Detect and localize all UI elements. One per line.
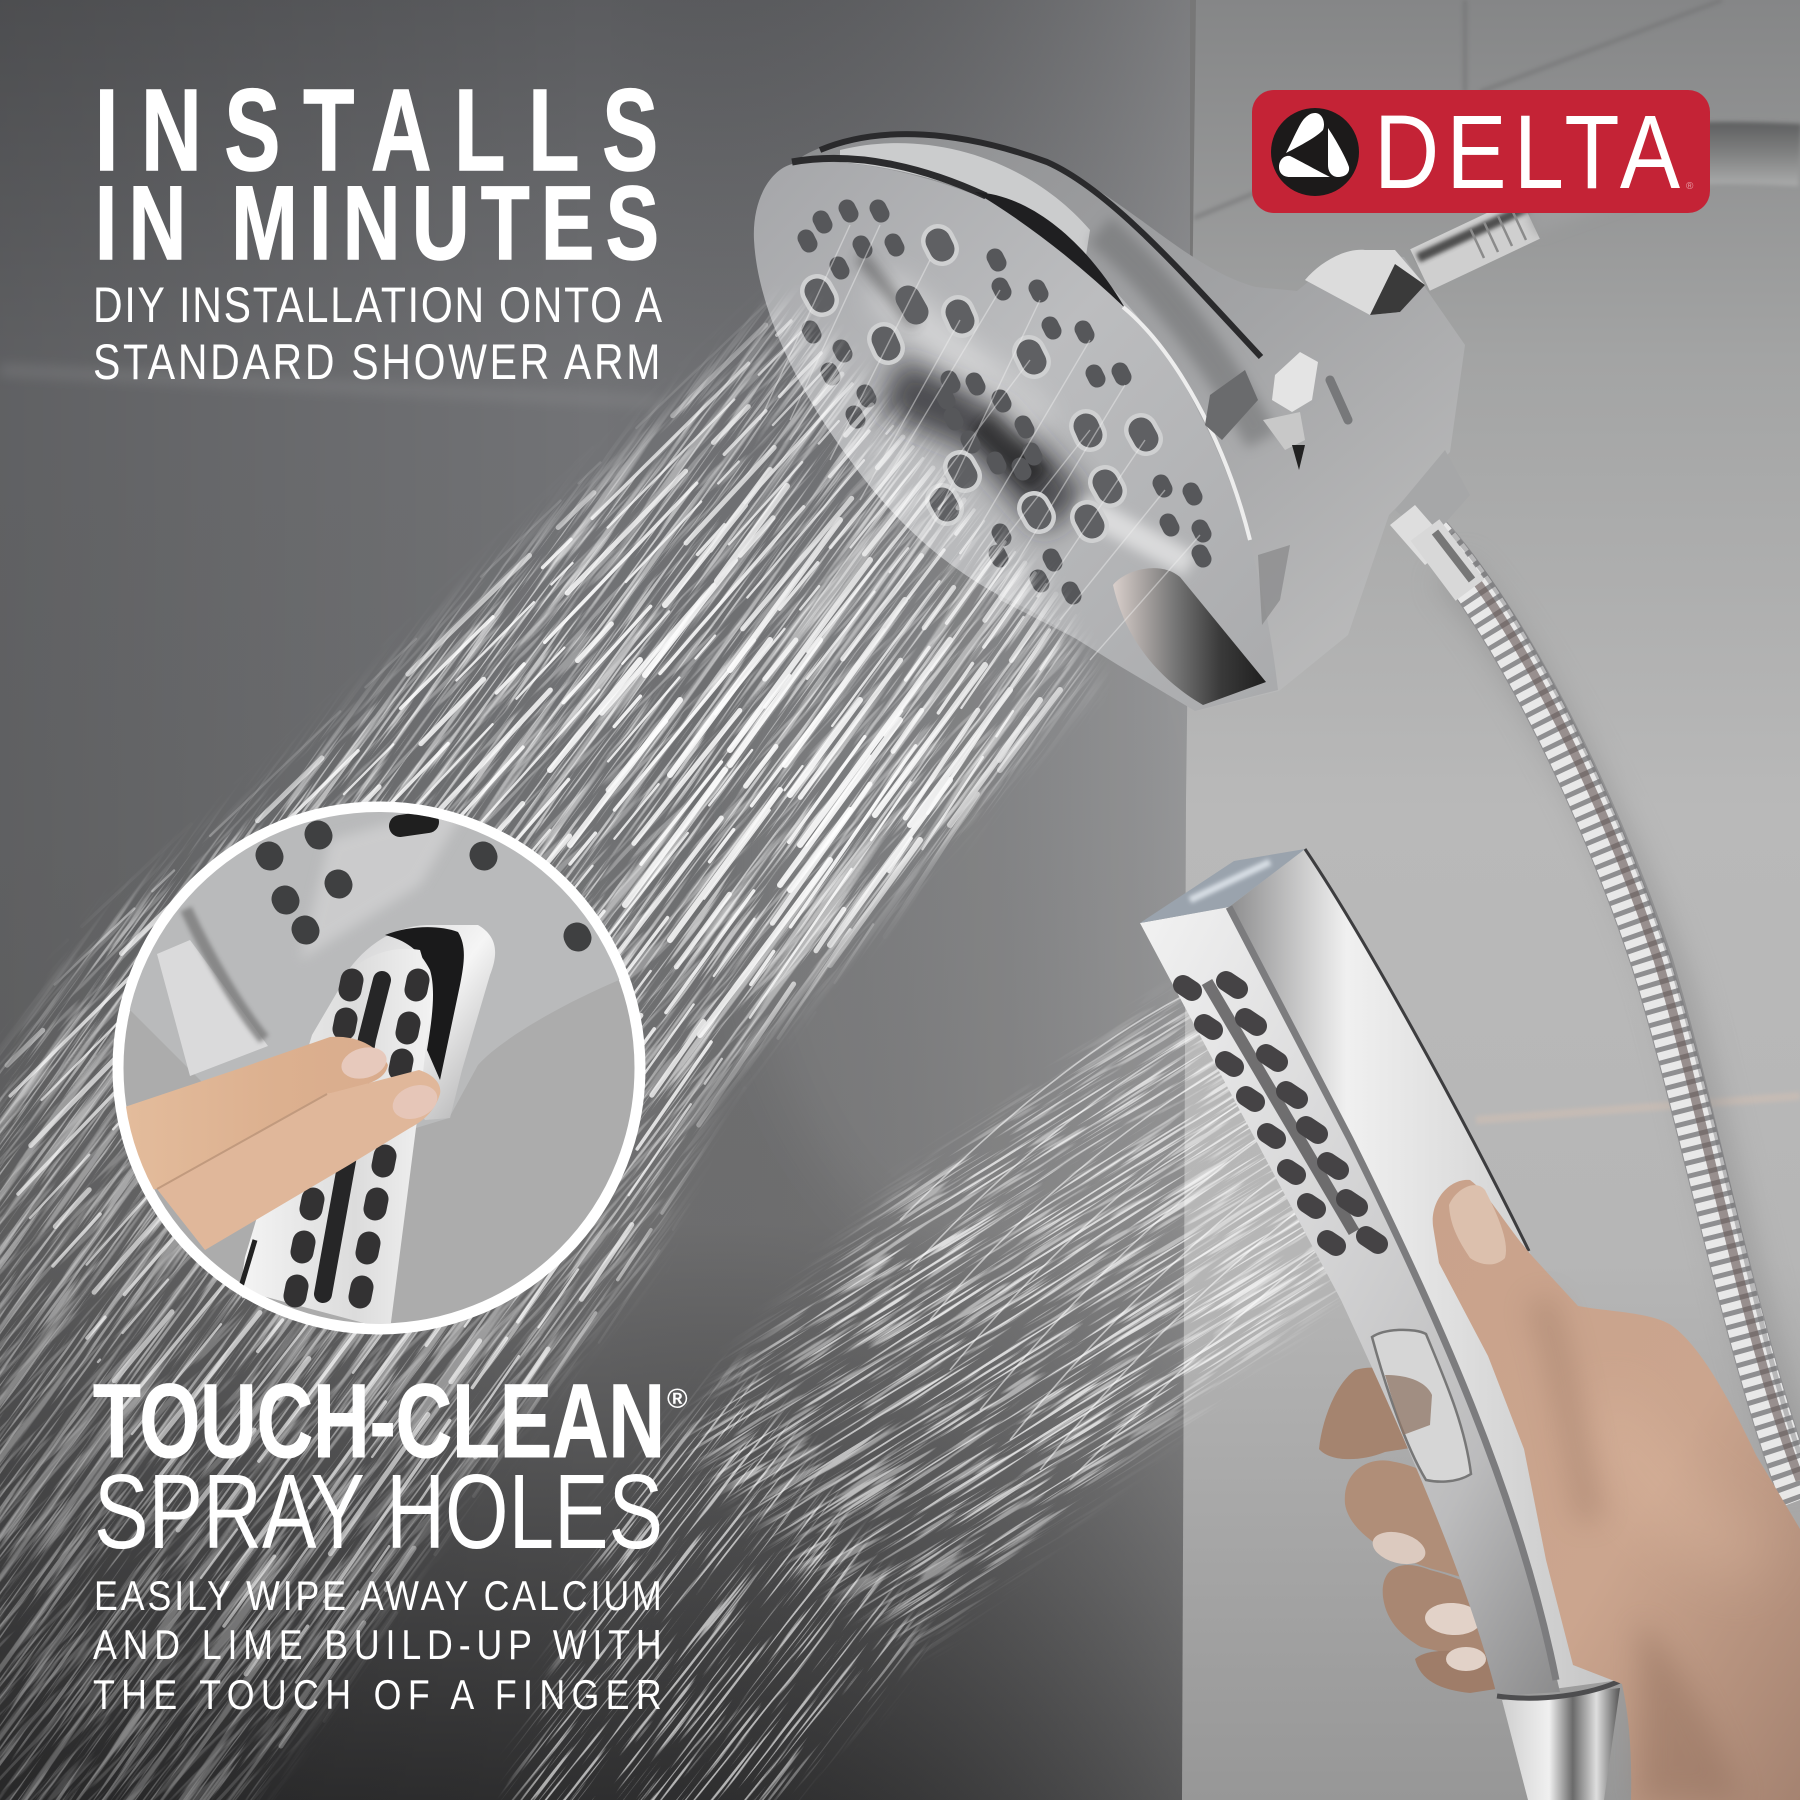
water spray from shower head	[0, 225, 1200, 1800]
spray texture	[0, 300, 1090, 1800]
handle front face	[1140, 907, 1560, 1696]
heading: touch-clean spray holes	[93, 1363, 688, 1571]
rim dark lines	[820, 134, 1261, 357]
logo wordmark: DELTA	[1374, 93, 1681, 211]
lower tube	[1502, 1688, 1620, 1800]
heading: installs in minutes	[95, 67, 659, 282]
button	[1372, 1330, 1471, 1482]
text: DIY installation description: STANDARD SHOWER ARM	[93, 334, 660, 390]
dome highlight	[840, 143, 1090, 262]
finger reflection in button	[1385, 1375, 1432, 1435]
thumbnail	[1449, 1185, 1506, 1264]
logo: Delta	[1252, 90, 1710, 213]
fine jet lines	[900, 995, 1330, 1480]
heading: touch-clean spray holes: ®	[667, 1383, 688, 1414]
fingernails	[1369, 1527, 1429, 1569]
spray holes large	[817, 241, 1146, 526]
palm shading	[1640, 1620, 1740, 1800]
fingers	[110, 1037, 388, 1195]
text: touch-clean description	[93, 1573, 662, 1719]
head body	[792, 134, 1465, 711]
shower arm	[1418, 153, 1800, 270]
face disc	[754, 162, 1278, 711]
background: dark shower wall	[0, 0, 1260, 1800]
water spray from hand shower	[505, 995, 1365, 1800]
hand shower handle	[1140, 849, 1622, 1800]
nozzle strip	[240, 949, 432, 1330]
fingernails	[338, 1043, 390, 1083]
heading: installs in minutes: INSTALLS	[95, 67, 658, 195]
black slot	[385, 927, 464, 1080]
top face	[1140, 849, 1305, 923]
dark wedge along rim	[975, 192, 1125, 308]
thin jets over face	[760, 225, 1200, 660]
collar	[1497, 1680, 1622, 1698]
text: DIY installation description	[93, 277, 663, 390]
outer chrome shading	[1100, 230, 1262, 440]
text: DIY installation description: DIY INSTALLATION ONTO A	[93, 277, 663, 333]
nozzle slit	[1207, 982, 1354, 1232]
logo emblem	[1271, 108, 1359, 196]
spray holes small	[806, 208, 1203, 596]
clamp piece	[1305, 250, 1425, 315]
nozzles	[1183, 981, 1378, 1246]
ridge	[1229, 907, 1556, 1680]
logo: Delta: ®	[1686, 181, 1694, 192]
text: touch-clean description: THE TOUCH OF A FINGER	[93, 1672, 662, 1719]
hand fingers behind handle	[1319, 1368, 1522, 1693]
shower head	[754, 134, 1472, 711]
handle right face	[1229, 849, 1620, 1690]
selector knob and clamp	[1205, 370, 1258, 440]
head surface	[120, 800, 640, 1128]
hand palm and thumb	[1433, 1180, 1800, 1800]
face reflections	[890, 385, 1065, 515]
nozzles	[295, 980, 418, 1297]
chrome left piece	[157, 940, 268, 1076]
chrome hood	[345, 925, 495, 1120]
hose	[1432, 533, 1800, 1500]
lower spray texture	[505, 1365, 918, 1800]
inset circle: touch-clean close-up	[110, 800, 640, 1330]
spray holes	[269, 834, 578, 938]
hose connector	[1395, 450, 1470, 540]
upper spray texture	[690, 1000, 1365, 1640]
bright jets	[0, 290, 1086, 1800]
text: touch-clean description: EASILY WIPE AWAY CALCIUM	[94, 1573, 662, 1620]
heading: touch-clean spray holes: SPRAY HOLES	[94, 1453, 663, 1571]
lower slot	[1113, 568, 1266, 705]
text: touch-clean description: AND LIME BUILD-UP WITH	[93, 1622, 662, 1669]
background: light tile wall	[1182, 0, 1800, 1800]
heading: installs in minutes: IN MINUTES	[95, 164, 659, 282]
heading: touch-clean spray holes: TOUCH-CLEAN	[93, 1363, 665, 1480]
